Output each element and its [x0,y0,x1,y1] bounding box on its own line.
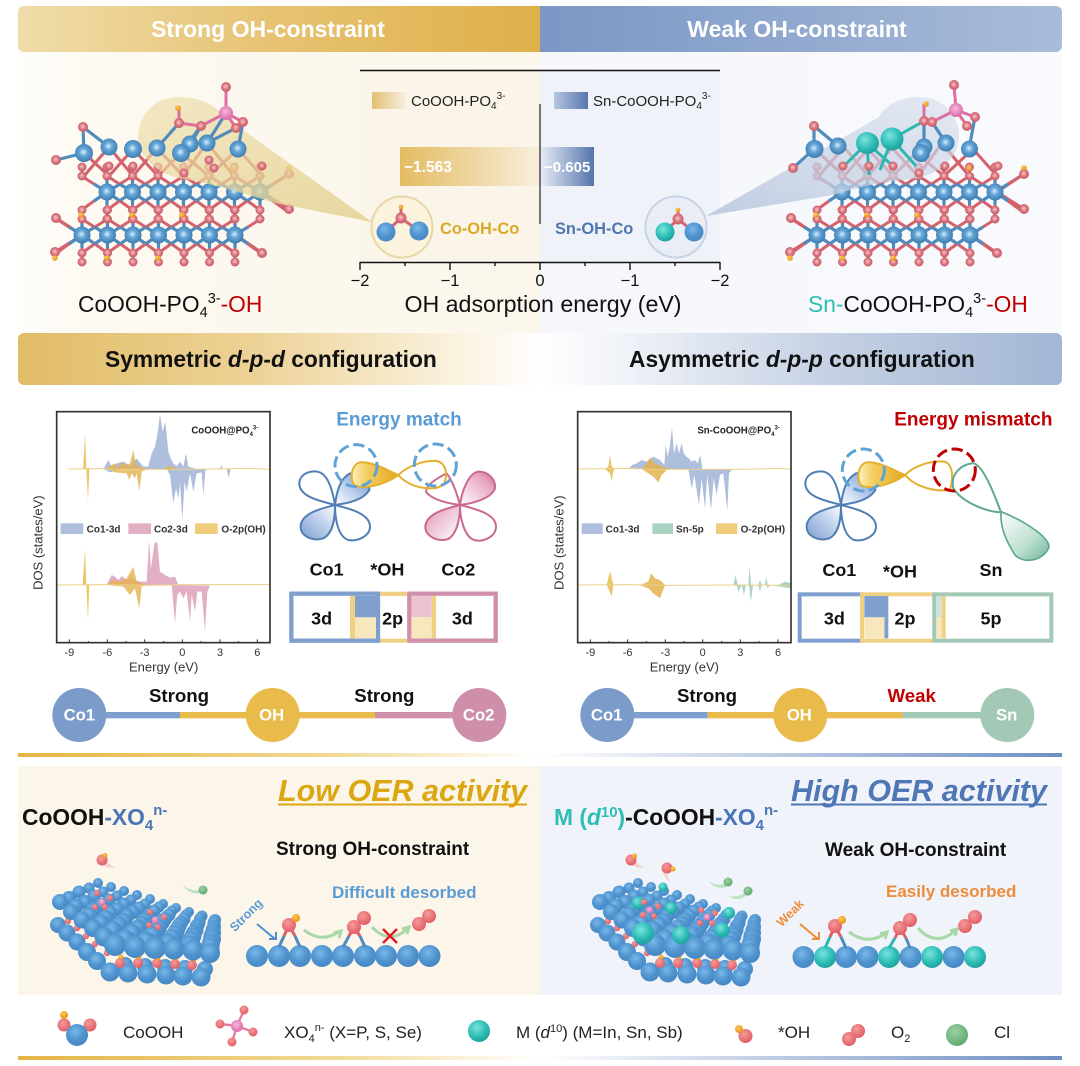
illustration: strong adsorption chain [246,909,440,967]
icon: CoOOH [58,1011,96,1046]
illustration: M-CoOOH-XO4 slab [590,854,761,986]
structure: CoOOH-PO4 lattice layers [50,143,294,266]
banner: symmetric and asymmetric configuration: Symmetric d-p-d configuration [105,346,437,372]
diagram: energy level boxes, Co1 OH Co2: 3d [452,608,473,628]
panel: top left background [18,52,540,333]
legend: Sn-CoOOH-PO4 [554,91,711,112]
bond diagram: Co1-OH-Co2: OH [259,706,284,725]
text: Difficult desorbed: Difficult desorbed [332,883,477,902]
formula: Sn-CoOOH-PO4-OH: -OH [986,291,1028,317]
diagram: energy level boxes, Co1 OH Sn: 5p [980,608,1001,628]
label: XO4: (X=P, S, Se) [324,1023,422,1042]
diagram: energy level boxes, Co1 OH Sn: *OH [883,561,917,581]
diagram: energy level boxes, Co1 OH Sn: 3d [824,608,845,628]
heading: High OER activity: High OER activity [791,774,1049,808]
chart: DOS of CoOOH@PO4: -3 [140,647,150,659]
arrows: easy desorption steps [849,928,957,939]
formula: CoOOH-PO4-OH: CoOOH-PO [78,291,200,317]
bond diagram: Co1-OH-Sn: Weak [887,685,936,706]
bond diagram: Co1-OH-Co2: Co1 [64,706,95,725]
label: XO4: XO [284,1023,309,1042]
chart: DOS of CoOOH@PO4: 0 [179,647,185,659]
bond diagram: Co1-OH-Co2: Strong [354,685,414,706]
label: O2: 2 [904,1033,910,1045]
bar chart: OH adsorption energy [351,70,729,317]
header: weak OH-constraint [540,6,1062,52]
arrows: reaction steps [304,927,409,938]
callout: Co-OH-Co bubble [372,196,519,258]
chart: DOS of Sn-CoOOH@PO4: DOS (states/eV) [552,495,567,590]
bar: -1.563: −1.563 [404,159,452,176]
label: O2: O [891,1023,904,1042]
chart: DOS of CoOOH@PO4: 4 [250,432,254,438]
diagram: energy level boxes, Co1 OH Sn: Co1 [822,560,856,580]
diagram: orbital overlap, energy match [299,410,496,541]
diagram: energy level boxes, Co1 OH Co2: 2p [382,608,403,628]
chart: DOS of Sn-CoOOH@PO4: Sn-CoOOH@PO [697,426,771,437]
chart: DOS of CoOOH@PO4: Energy (eV) [129,660,198,675]
icon: XO4 [216,1006,258,1046]
illustration: weak adsorption chain [792,910,986,968]
legend: atom key [58,1006,1010,1046]
divider: bottom right rule [540,1056,1062,1060]
structure: Sn-CoOOH-PO4 surface atoms [788,80,1002,178]
icon: *OH [735,1025,752,1043]
chart: DOS of CoOOH@PO4 [31,412,270,675]
banner: symmetric and asymmetric configuration [18,333,1062,385]
bond diagram: Co1-OH-Sn: OH [787,706,812,725]
structure: Sn-CoOOH-PO4 lattice layers [785,143,1029,266]
formula: M(d10)-CoOOH-XO4: 4 [756,817,765,834]
chart: DOS of Sn-CoOOH@PO4 [552,412,791,675]
formula: Sn-CoOOH-PO4-OH: 3- [973,291,986,307]
bar: -1.563 [400,147,540,186]
bar chart: OH adsorption energy: −2 [351,272,369,290]
header: strong OH-constraint: Strong OH-constraint [151,16,385,42]
icon: O2 [842,1024,865,1046]
diagram: energy level boxes, Co1 OH Co2: Co1 [310,560,344,580]
panel: low OER activity [18,766,540,995]
divider: right gradient rule [540,753,1062,757]
text: Easily desorbed: Easily desorbed [886,882,1016,901]
bond diagram: Co1-OH-Co2: Strong [149,685,209,706]
label: CoOOH: CoOOH [123,1023,183,1042]
heading: Low OER activity: Low OER activity [278,774,529,808]
callout: gold lens from lattice to Co-OH-Co [138,97,372,222]
chart: DOS of CoOOH@PO4: 6 [254,647,260,659]
bond diagram: Co1-OH-Sn: Co1 [591,706,622,725]
chart: DOS of Sn-CoOOH@PO4: -6 [623,647,633,659]
formula: M(d10)-CoOOH-XO4: -CoOOH-XO [625,804,756,830]
bar chart: OH adsorption energy: 0 [535,272,545,290]
chart: DOS of Sn-CoOOH@PO4: 4 [771,432,775,438]
structure: CoOOH-PO4 surface atoms [51,82,266,178]
formula: M(d10)-CoOOH-XO4: n- [764,802,778,819]
legend: CoOOH-PO4: 4 [491,101,497,112]
callout: Co-OH-Co bubble: Co-OH-Co [440,220,519,238]
panel: high OER activity [540,766,1062,995]
chart: DOS of CoOOH@PO4: 3 [217,647,223,659]
label: Strong arrow: Strong [227,896,265,934]
bond diagram: Co1-OH-Co2: Co2 [463,706,494,725]
bond diagram: Co1-OH-Sn: Strong [677,685,737,706]
chart: DOS of Sn-CoOOH@PO4: O-2p(OH) [741,524,785,535]
diagram: energy level boxes, Co1 OH Sn [800,560,1051,641]
formula: CoOOH-XO4: CoOOH-XO [22,804,145,830]
chart: DOS of CoOOH@PO4: CoOOH@PO [191,426,250,437]
callout: Sn-OH-Co bubble: Sn-OH-Co [555,220,633,238]
bar chart: OH adsorption energy: −2 [711,272,729,290]
diagram: energy level boxes, Co1 OH Co2: 3d [311,608,332,628]
diagram: orbital overlap, energy mismatch [805,410,1052,560]
formula: CoOOH-PO4-OH: 3- [208,291,221,307]
diagram: energy level boxes, Co1 OH Co2: Co2 [441,560,475,580]
chart: DOS of Sn-CoOOH@PO4: -9 [585,647,595,659]
diagram: energy level boxes, Co1 OH Sn: Sn [980,560,1002,580]
formula: Sn-CoOOH-PO4-OH: 4 [965,305,973,321]
formula: CoOOH-XO4: 4 [145,817,154,834]
bond diagram: Co1-OH-Sn [580,685,1034,742]
chart: DOS of Sn-CoOOH@PO4: -3 [660,647,670,659]
chart: DOS of CoOOH@PO4: Co1-3d [87,524,121,535]
chart: DOS of CoOOH@PO4: DOS (states/eV) [31,495,46,590]
icon: Cl [946,1024,968,1046]
label: Weak arrow: Weak [774,897,807,930]
bar chart: OH adsorption energy: −1 [621,272,639,290]
formula: M(d10)-CoOOH-XO4: 10 [601,804,618,821]
header: weak OH-constraint: Weak OH-constraint [687,16,907,42]
label: Weak arrow [774,897,819,939]
illustration: CoOOH-XO4 slab [50,853,221,986]
diagram: energy level boxes, Co1 OH Co2: *OH [370,560,404,580]
text: Weak OH-constraint: Weak OH-constraint [825,840,1007,861]
banner: symmetric and asymmetric configuration: Asymmetric d-p-p configuration [629,346,975,372]
formula: M(d10)-CoOOH-XO4: M (d [554,804,601,830]
label: XO4: 4 [309,1033,315,1045]
label: M d10: ) (M=In, Sn, Sb) [562,1023,683,1042]
chart: DOS of Sn-CoOOH@PO4: Energy (eV) [650,660,719,675]
chart: DOS of Sn-CoOOH@PO4: Sn-5p [676,524,704,535]
diagram: orbital overlap, energy mismatch: Energy mismatch [894,410,1052,431]
callout: Sn-OH-Co bubble [555,196,706,258]
legend: Sn-CoOOH-PO4: 3- [702,91,711,102]
chart: DOS of CoOOH@PO4: Co2-3d [154,524,188,535]
chart: DOS of Sn-CoOOH@PO4: 0 [700,647,706,659]
bar chart: OH adsorption energy: −1 [441,272,459,290]
chart: DOS of Sn-CoOOH@PO4: Co1-3d [606,524,640,535]
chart: DOS of CoOOH@PO4: 3- [253,425,258,431]
text: Strong OH-constraint: Strong OH-constraint [276,839,470,860]
bar: -0.605: −0.605 [544,159,590,176]
bar: -0.605 [540,147,594,186]
label: Cl: Cl [994,1023,1010,1042]
chart: DOS of Sn-CoOOH@PO4: 3- [774,425,780,431]
legend: CoOOH-PO4: CoOOH-PO [411,93,491,110]
icon: red cross [383,929,397,943]
legend: Sn-CoOOH-PO4: 4 [696,101,702,112]
divider: left gradient rule [18,753,540,757]
chart: DOS of CoOOH@PO4: -6 [102,647,112,659]
callout: blue lens from lattice to Sn-OH-Co [706,97,959,216]
legend: CoOOH-PO4: 3- [497,91,505,102]
bond diagram: Co1-OH-Sn: Sn [996,706,1017,725]
formula: Sn-CoOOH-PO4-OH: Sn-CoOOH-PO [808,291,965,317]
diagram: energy level boxes, Co1 OH Co2 [291,560,496,643]
chart: DOS of CoOOH@PO4: O-2p(OH) [221,524,266,535]
header: strong OH-constraint [18,6,540,52]
formula: CoOOH-PO4-OH: -OH [221,291,262,317]
legend: CoOOH-PO4 [372,91,505,112]
legend: Sn-CoOOH-PO4: Sn-CoOOH-PO [593,93,696,110]
label: M d10: 10 [550,1023,562,1035]
chart: DOS of Sn-CoOOH@PO4: 3 [737,647,743,659]
bond diagram: Co1-OH-Co2 [52,685,506,742]
label: M d10: M (d [516,1023,550,1042]
plot background [360,71,720,262]
formula: M(d10)-CoOOH-XO4: ) [618,804,625,830]
diagram: orbital overlap, energy match: Energy match [336,410,462,431]
chart: DOS of Sn-CoOOH@PO4: 6 [775,647,781,659]
panel: top right background [540,52,1062,333]
label: XO4: n- [315,1022,325,1034]
diagram: energy level boxes, Co1 OH Sn: 2p [894,608,915,628]
bar chart: OH adsorption energy: OH adsorption energy (eV) [404,291,682,317]
icon: M d10 [468,1020,490,1042]
chart: DOS of CoOOH@PO4: -9 [64,647,74,659]
formula: CoOOH-PO4-OH: 4 [200,305,208,321]
divider: bottom left rule [18,1056,540,1060]
label: *OH: *OH [778,1023,810,1042]
formula: CoOOH-XO4: n- [153,802,167,819]
